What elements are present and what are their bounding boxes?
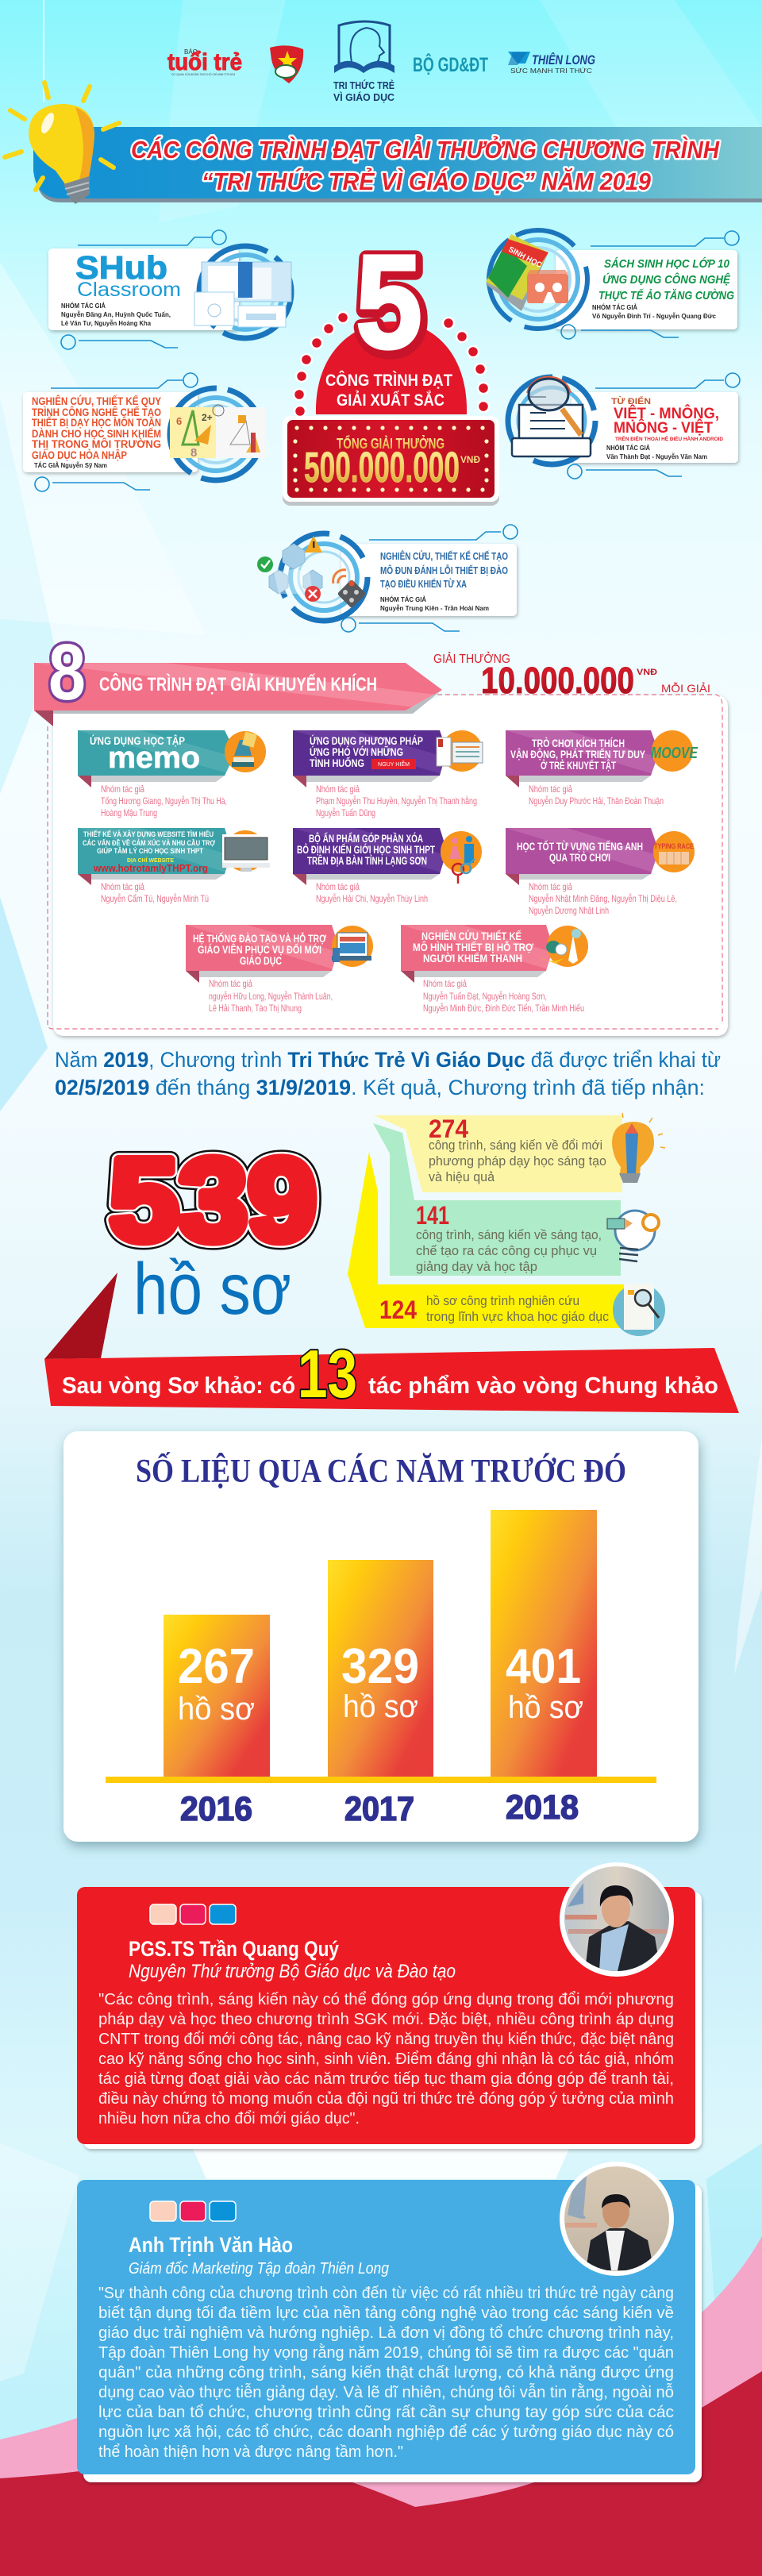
quote: biết tận dụng tối đa tiềm lực của nền tảng công nghệ vào trong các sáng kiến về — [98, 2305, 674, 2322]
ring — [489, 230, 587, 329]
panel: 5 outstanding works centre — [283, 227, 499, 506]
card: MOOVE game — [506, 730, 698, 807]
icon: network diagnostics — [257, 536, 366, 608]
card: English vocabulary game — [506, 828, 695, 916]
card: MOOVE game: Nguyễn Duy Phước Hải, Thân Đoàn Thuận — [529, 795, 664, 807]
title: NGHIÊN CỨU, THIẾT KẾ CHẾ TẠO — [380, 550, 508, 562]
quote: dụng cao vào thực tiễn giảng dạy. Và lẽ dĩ nhiên, chúng tôi vẫn tin rằng, ngoài nỗ — [98, 2383, 674, 2401]
panel: quote PGS.TS Tran Quang Quy — [77, 1862, 702, 2149]
prize box: TỔNG GIẢI THƯỞNG — [337, 435, 444, 452]
title — [598, 256, 734, 302]
card: gender bias: BỎ ĐỊNH KIẾN GIỚI HỌC SINH THPT — [297, 844, 436, 856]
card: English vocabulary game: Nguyễn Nhật Minh Đăng, Nguyễn Thị Diệu Lê, — [529, 892, 677, 904]
card — [341, 544, 517, 616]
panel: 141: 141 — [416, 1201, 449, 1230]
title: MÔ ĐUN ĐÁNH LỖI THIẾT BỊ ĐÀO — [380, 564, 508, 576]
bar 2016: 267 — [178, 1639, 255, 1694]
panel: 274: và hiệu quả — [429, 1169, 495, 1184]
connector lines — [341, 525, 518, 632]
card: dangerous situations app: TÌNH HUỐNG — [310, 757, 364, 769]
title: NGHIÊN CỨU, THIẾT KẾ QUY — [32, 395, 161, 407]
card — [48, 248, 239, 330]
card: memo: memo — [108, 741, 200, 775]
card — [556, 250, 737, 329]
bar 2018: hồ sơ — [508, 1690, 583, 1725]
quote: nhiều hơn nữa cho đổi mới giáo dục". — [98, 2110, 360, 2127]
panel: research for visually impaired — [23, 373, 265, 491]
logo: Thien Long: THIÊN LONG — [532, 52, 595, 67]
image: 8 — [190, 446, 197, 460]
panel: 141: giảng dạy và học tập — [416, 1259, 537, 1274]
logo: Tuoi Tre: CƠ QUAN CỦA ĐOÀN TNCS HỒ CHÍ MINH TP.HCM — [171, 72, 235, 76]
prize box: 500.000.000 — [304, 444, 460, 491]
title: THIẾT BỊ DẠY HỌC MÔN TOÁN — [32, 417, 161, 429]
authors: NHÓM TÁC GIẢ — [61, 301, 106, 310]
title — [32, 395, 161, 461]
quote: CNTT trong đổi mới công tác, nâng cao kỹ năng truyền thụ kiến thức, đặc biệt nâng — [98, 2031, 674, 2048]
panel: 124: hồ sơ công trình nghiên cứu — [426, 1293, 579, 1308]
panel: SHub Classroom: Lê Văn Tư, Nguyễn Hoàng Kha — [61, 319, 151, 327]
card: MOOVE game: Nhóm tác giả — [529, 784, 572, 795]
year labels: 2018 — [506, 1789, 579, 1827]
card: dangerous situations app: Nguyễn Tuấn Dũng — [316, 807, 375, 818]
year labels — [180, 1789, 579, 1828]
quote: "Các công trình, sáng kiến này có thể đóng góp ứng dụng trong đổi mới phương — [98, 1991, 674, 2008]
speaker role: Giám đốc Marketing Tập đoàn Thiên Long — [129, 2260, 389, 2278]
quote — [98, 2285, 674, 2461]
panel: Viet-Mnong dictionary: TRÊN ĐIỆN THOẠI HỆ ĐIỀU HÀNH ANDROID — [615, 434, 723, 442]
card: device for the deaf: Nguyễn Tuấn Đạt, Nguyễn Hoàng Sơn, — [423, 990, 547, 1002]
logo: Tri Thuc Tre Vi Giao Duc: VÌ GIÁO DỤC — [333, 91, 395, 103]
panel: SHub Classroom: Classroom — [77, 279, 181, 301]
card: English vocabulary game: TYPING RACE — [654, 842, 694, 850]
card: dangerous situations app — [293, 730, 483, 818]
card — [572, 392, 738, 463]
title text — [131, 135, 720, 195]
logo: Thien Long: SỨC MẠNH TRI THỨC — [510, 67, 592, 75]
card: device for the deaf: NGƯỜI KHIẾM THANH — [423, 953, 522, 965]
panel: 124: 124 — [379, 1296, 417, 1324]
panel: 8 encouragement prizes — [34, 628, 728, 1036]
bar 2018: 401 — [506, 1639, 581, 1694]
panel: 141 — [373, 1123, 659, 1276]
panel: 124 — [348, 1152, 665, 1336]
panel: 274: công trình, sáng kiến về đổi mới — [429, 1138, 602, 1153]
quote: tác giả từng đoạt giải vào các năm trước tiếp tục tham gia đóng góp để tranh tài, — [98, 2070, 674, 2088]
red ribbon: shortlist: Sau vòng Sơ khảo: có — [62, 1373, 295, 1399]
authors: NHÓM TÁC GIẢ — [380, 595, 426, 603]
speaker name: Anh Trịnh Văn Hào — [129, 2233, 293, 2257]
panel: 274: 274 — [429, 1115, 468, 1143]
red ribbon: shortlist: tác phẩm vào vòng Chung khảo — [368, 1373, 718, 1399]
card: counselling website: Nguyễn Cẩm Tú, Nguyễn Minh Tú — [101, 892, 209, 904]
card: counselling website: www.hotrotamlyTHPT.org — [93, 862, 208, 874]
card: dangerous situations app: NGUY HIỂM — [378, 760, 410, 768]
quote: cao kỹ năng sống cho học sinh, sinh viên. Điểm đáng ghi nhận là có tác giả, nhóm — [98, 2050, 674, 2068]
big number 539: 539 — [110, 1135, 317, 1265]
axis line — [106, 1777, 656, 1783]
connector lines — [35, 373, 198, 491]
card: counselling website: CÁC VẤN ĐỀ VỀ CẢM XÚC VÀ NHU CẦU TRỢ — [83, 838, 216, 848]
quote: giáo dục trải nghiệm và hướng nghiệp. Là đơn vị đồng tổ chức chương trình này, — [98, 2324, 674, 2342]
panel: bar chart previous years — [64, 1431, 698, 1842]
title banner — [33, 127, 762, 202]
quote: nguồn lực xã hội, các tổ chức, các doanh nghiệp để các ý tưởng giáo dục này có — [98, 2424, 674, 2441]
intro paragraph — [55, 1048, 721, 1099]
logo: Bo GD&DT: BỘ GD&ĐT — [413, 52, 488, 76]
panel: Viet-Mnong dictionary: MNÔNG - VIỆT — [614, 419, 713, 437]
red ribbon: shortlist: 13 — [298, 1337, 357, 1412]
number 5: 5 — [357, 229, 424, 379]
title: TẠO ĐIỀU KHIỂN TỪ XA — [380, 578, 467, 590]
card: dangerous situations app: Nhóm tác giả — [316, 784, 360, 795]
panel: SHub Classroom — [48, 230, 291, 349]
year labels: 2017 — [344, 1790, 414, 1828]
bar 2016: hồ sơ — [178, 1692, 255, 1727]
card: memo: Hoàng Mậu Trung — [101, 807, 157, 818]
card: teacher support system: Lê Hải Thanh, Tào Thị Nhung — [209, 1003, 302, 1014]
title: THỊ TRONG MÔI TRƯỜNG — [32, 438, 161, 450]
screenshots — [194, 262, 291, 327]
card: gender bias: TRÊN ĐỊA BÀN TỈNH LẠNG SƠN — [307, 855, 427, 867]
card: counselling website: GIÚP TÂM LÝ CHO HỌC SINH THPT — [97, 846, 203, 856]
quote — [98, 1991, 674, 2127]
panel: SHub Classroom: Nguyễn Đăng An, Huỳnh Quốc Tuấn, — [61, 310, 171, 318]
connector lines — [561, 231, 739, 339]
icon: VR goggles — [527, 270, 568, 303]
card: gender bias: BỘ ẤN PHẨM GÓP PHẦN XÓA — [309, 833, 423, 845]
title — [380, 550, 508, 590]
bar 2017 — [328, 1560, 433, 1777]
prize label — [433, 651, 710, 701]
quote: điều này chứng tỏ mong muốn của đội ngũ tri thức trẻ đóng góp ý tưởng của mình — [98, 2090, 674, 2108]
icon: light bulb — [5, 0, 119, 204]
panel: 141: công trình, sáng kiến về sáng tạo, — [416, 1227, 602, 1242]
logo: Tri Thuc Tre Vi Giao Duc: TRI THỨC TRẺ — [333, 79, 394, 91]
ring — [170, 388, 262, 480]
card: MOOVE game: TRÒ CHƠI KÍCH THÍCH — [532, 737, 625, 749]
logo: Tuoi Tre: tuổi trẻ — [167, 49, 242, 75]
title text: CÁC CÔNG TRÌNH ĐẠT GIẢI THƯỞNG CHƯƠNG TRÌNH — [131, 135, 720, 164]
quote: pháp dạy và học theo chương trình SGK mới. Đặc biệt, nhiều công trình áp dụng — [98, 2011, 674, 2028]
dome with dots — [294, 312, 489, 417]
bar 2016 — [164, 1615, 270, 1777]
prize box: VNĐ — [460, 454, 480, 465]
image — [170, 405, 265, 460]
intro paragraph: Năm 2019, Chương trình Tri Thức Trẻ Vì Giáo Dục đã được triển khai từ — [55, 1048, 721, 1072]
ring — [280, 533, 368, 621]
big number 539: 539 — [110, 1135, 317, 1265]
quote: Tập đoàn Thiên Long hy vọng rằng năm 2019, chúng tôi sẽ tìm ra được các "quán — [98, 2343, 674, 2362]
red ribbon: shortlist — [44, 1273, 739, 1413]
card: teacher support system: Nhóm tác giả — [209, 978, 252, 989]
quote: quân" của những công trình, sáng kiến thật chất lượng, có khả năng được ứng — [98, 2364, 674, 2382]
card: teacher support system — [186, 925, 373, 1014]
card: counselling website: THIẾT KẾ VÀ XÂY DỰNG WEBSITE TÌM HIỂU — [83, 830, 214, 839]
authors: NHÓM TÁC GIẢ — [606, 443, 650, 452]
title: SÁCH SINH HỌC LỚP 10 — [604, 256, 730, 271]
card: MOOVE game: Ở TRẺ KHUYẾT TẬT — [541, 760, 617, 772]
card: device for the deaf: NGHIÊN CỨU THIẾT KẾ — [421, 930, 521, 942]
card: dangerous situations app: ỨNG PHÓ VỚI NHỮNG — [310, 746, 403, 758]
logo: youth union — [270, 45, 303, 83]
card: device for the deaf: Nguyễn Minh Đức, Đinh Đức Tiến, Trần Minh Hiếu — [423, 1002, 584, 1014]
prize label: GIẢI THƯỞNG — [433, 651, 510, 666]
panel: Viet-Mnong dictionary — [508, 373, 740, 479]
section banner: CÔNG TRÌNH ĐẠT GIẢI KHUYẾN KHÍCH — [99, 672, 377, 695]
card: teacher support system: GIÁO VIÊN PHỤC VỤ ĐỔI MỚI — [198, 944, 321, 956]
logo: Tuoi Tre: BÁO — [184, 48, 198, 56]
card: English vocabulary game: HỌC TỐT TỪ VỰNG TIẾNG ANH — [517, 841, 643, 853]
title text: “TRI THỨC TRẺ VÌ GIÁO DỤC” NĂM 2019 — [202, 167, 652, 195]
label: ho so: hồ sơ — [133, 1249, 291, 1330]
prize label: MỖI GIẢI — [661, 681, 710, 695]
year labels: 2016 — [180, 1790, 252, 1828]
colour chips — [150, 1904, 236, 1924]
card: gender bias: Nguyễn Hải Chi, Nguyễn Thùy Linh — [316, 892, 428, 904]
panel: 5 outstanding works centre: GIẢI XUẤT SẮC — [337, 391, 444, 410]
card: MOOVE game: VẬN ĐỘNG, PHÁT TRIỂN TƯ DUY — [510, 749, 645, 760]
panel: remote control training module: Nguyễn Trung Kiên - Trần Hoài Nam — [380, 604, 489, 612]
quote: lực của ban tổ chức, chương trình cũng rất cần sự chung tay góp sức của các — [98, 2404, 674, 2421]
title: TỪ ĐIỂN — [611, 396, 651, 406]
card: teacher support system: HỆ THỐNG ĐÀO TẠO VÀ HỖ TRỢ — [193, 933, 326, 945]
colour chips — [150, 2201, 236, 2221]
bar 2017: hồ sơ — [343, 1689, 418, 1724]
card: memo: ỨNG DỤNG HỌC TẬP — [90, 735, 185, 747]
card: English vocabulary game: Nguyễn Dương Nhật Linh — [529, 904, 609, 916]
panel: remote control training module — [257, 525, 518, 632]
panel: Sach Sinh hoc 10: Võ Nguyễn Đình Trí - Nguyễn Quang Đức — [592, 312, 716, 320]
card: English vocabulary game: QUA TRÒ CHƠI — [549, 852, 610, 864]
card: device for the deaf: Nhóm tác giả — [423, 978, 467, 989]
icon: laptop and magnifier — [512, 378, 591, 456]
connector lines — [61, 230, 226, 349]
title: TRÌNH CÔNG NGHỆ CHẾ TẠO — [32, 406, 161, 418]
card: memo: Tống Hương Giang, Nguyễn Thị Thu Hà, — [101, 795, 227, 807]
SHub logo: SHub — [75, 249, 167, 286]
bar 2017: 329 — [341, 1639, 419, 1694]
white panel — [53, 695, 728, 1036]
card: teacher support system: nguyễn Hữu Long, Nguyễn Thành Luân, — [209, 990, 333, 1002]
logo: Thien Long — [508, 52, 595, 75]
authors: NHÓM TÁC GIẢ — [592, 302, 637, 311]
panel: Sach Sinh hoc 10 — [486, 230, 739, 339]
card: device for the deaf — [401, 925, 588, 1014]
card: gender bias — [293, 828, 482, 904]
card: dangerous situations app: Phạm Nguyễn Thu Huyền, Nguyễn Thị Thanh hằng — [316, 795, 477, 807]
ring — [508, 377, 595, 464]
section banner: 8 — [48, 628, 86, 717]
dome text: CÔNG TRÌNH ĐẠT — [325, 371, 452, 390]
icon: textbook: SINH HỌC — [507, 245, 543, 270]
dashed border — [48, 695, 722, 1029]
card: English vocabulary game: Nhóm tác giả — [529, 881, 572, 892]
panel: Viet-Mnong dictionary: Văn Thành Đạt - Nguyễn Văn Nam — [606, 452, 707, 460]
panel: 124: trong lĩnh vực khoa học giáo dục — [426, 1309, 609, 1324]
bar 2018 — [491, 1510, 597, 1777]
logo row — [167, 21, 595, 103]
decorative bottom wave — [0, 2236, 762, 2576]
panel: Viet-Mnong dictionary: VIỆT - MNÔNG, — [614, 405, 719, 422]
author: TÁC GIẢ Nguyễn Sỹ Nam — [34, 460, 107, 469]
image: 2+ — [202, 412, 213, 423]
number 5: 5 — [356, 227, 422, 376]
speaker role: Nguyên Thứ trưởng Bộ Giáo dục và Đào tạo — [129, 1961, 456, 1982]
prize label: VNĐ — [637, 668, 657, 677]
portrait — [560, 2162, 674, 2276]
big number 539: 539 — [110, 1135, 317, 1265]
card: device for the deaf: MÔ HÌNH THIẾT BỊ HỖ TRỢ — [413, 941, 533, 953]
panel: 274 — [374, 1113, 665, 1192]
title: DÀNH CHO HỌC SINH KHIẾM — [32, 428, 161, 440]
logo: Tri Thuc Tre Vi Giao Duc — [333, 21, 395, 103]
breakdown panels — [348, 1113, 665, 1336]
quote: "Sự thành công của chương trình còn đến từ việc có rất nhiều tri thức trẻ ngày càng — [98, 2285, 674, 2302]
title: ỨNG DỤNG CÔNG NGHỆ — [602, 272, 731, 287]
icon: textbook — [486, 234, 548, 311]
panel: quote Trinh Van Hao — [77, 2162, 702, 2482]
title: GIÁO DỤC HÒA NHẬP — [32, 449, 127, 461]
portrait — [560, 1862, 674, 1977]
intro paragraph: 02/5/2019 đến tháng 31/9/2019. Kết quả, Chương trình đã tiếp nhận: — [55, 1076, 705, 1099]
card: memo: Nhóm tác giả — [101, 784, 144, 795]
card: MOOVE game: MOOVE — [651, 745, 698, 762]
card: counselling website: Nhóm tác giả — [101, 881, 144, 892]
card: teacher support system: GIÁO DỤC — [240, 955, 282, 967]
panel: 141: chế tạo ra các công cụ phục vụ — [416, 1243, 597, 1258]
image: 6 — [176, 415, 182, 427]
card: dangerous situations app: ỨNG DỤNG PHƯƠNG PHÁP — [310, 735, 423, 747]
panel: 274: phương pháp dạy học sáng tạo — [429, 1153, 606, 1169]
prize box — [283, 416, 499, 506]
chart title: SỐ LIỆU QUA CÁC NĂM TRƯỚC ĐÓ — [136, 1452, 626, 1490]
quote: thể hoàn thiện hơn và được nâng tầm hơn." — [98, 2443, 403, 2461]
title: THỰC TẾ ẢO TĂNG CƯỜNG — [598, 288, 734, 302]
prize label: 10.000.000 — [481, 660, 634, 701]
card — [23, 392, 198, 472]
card: counselling website: ĐỊA CHỈ WEBSITE — [127, 857, 174, 864]
section banner — [34, 628, 442, 726]
card: gender bias: Nhóm tác giả — [316, 881, 360, 892]
card: counselling website — [78, 828, 270, 904]
speaker name: PGS.TS Trần Quang Quý — [129, 1937, 339, 1961]
ring — [199, 246, 291, 338]
connector lines — [568, 373, 740, 479]
card: memo — [78, 730, 266, 818]
